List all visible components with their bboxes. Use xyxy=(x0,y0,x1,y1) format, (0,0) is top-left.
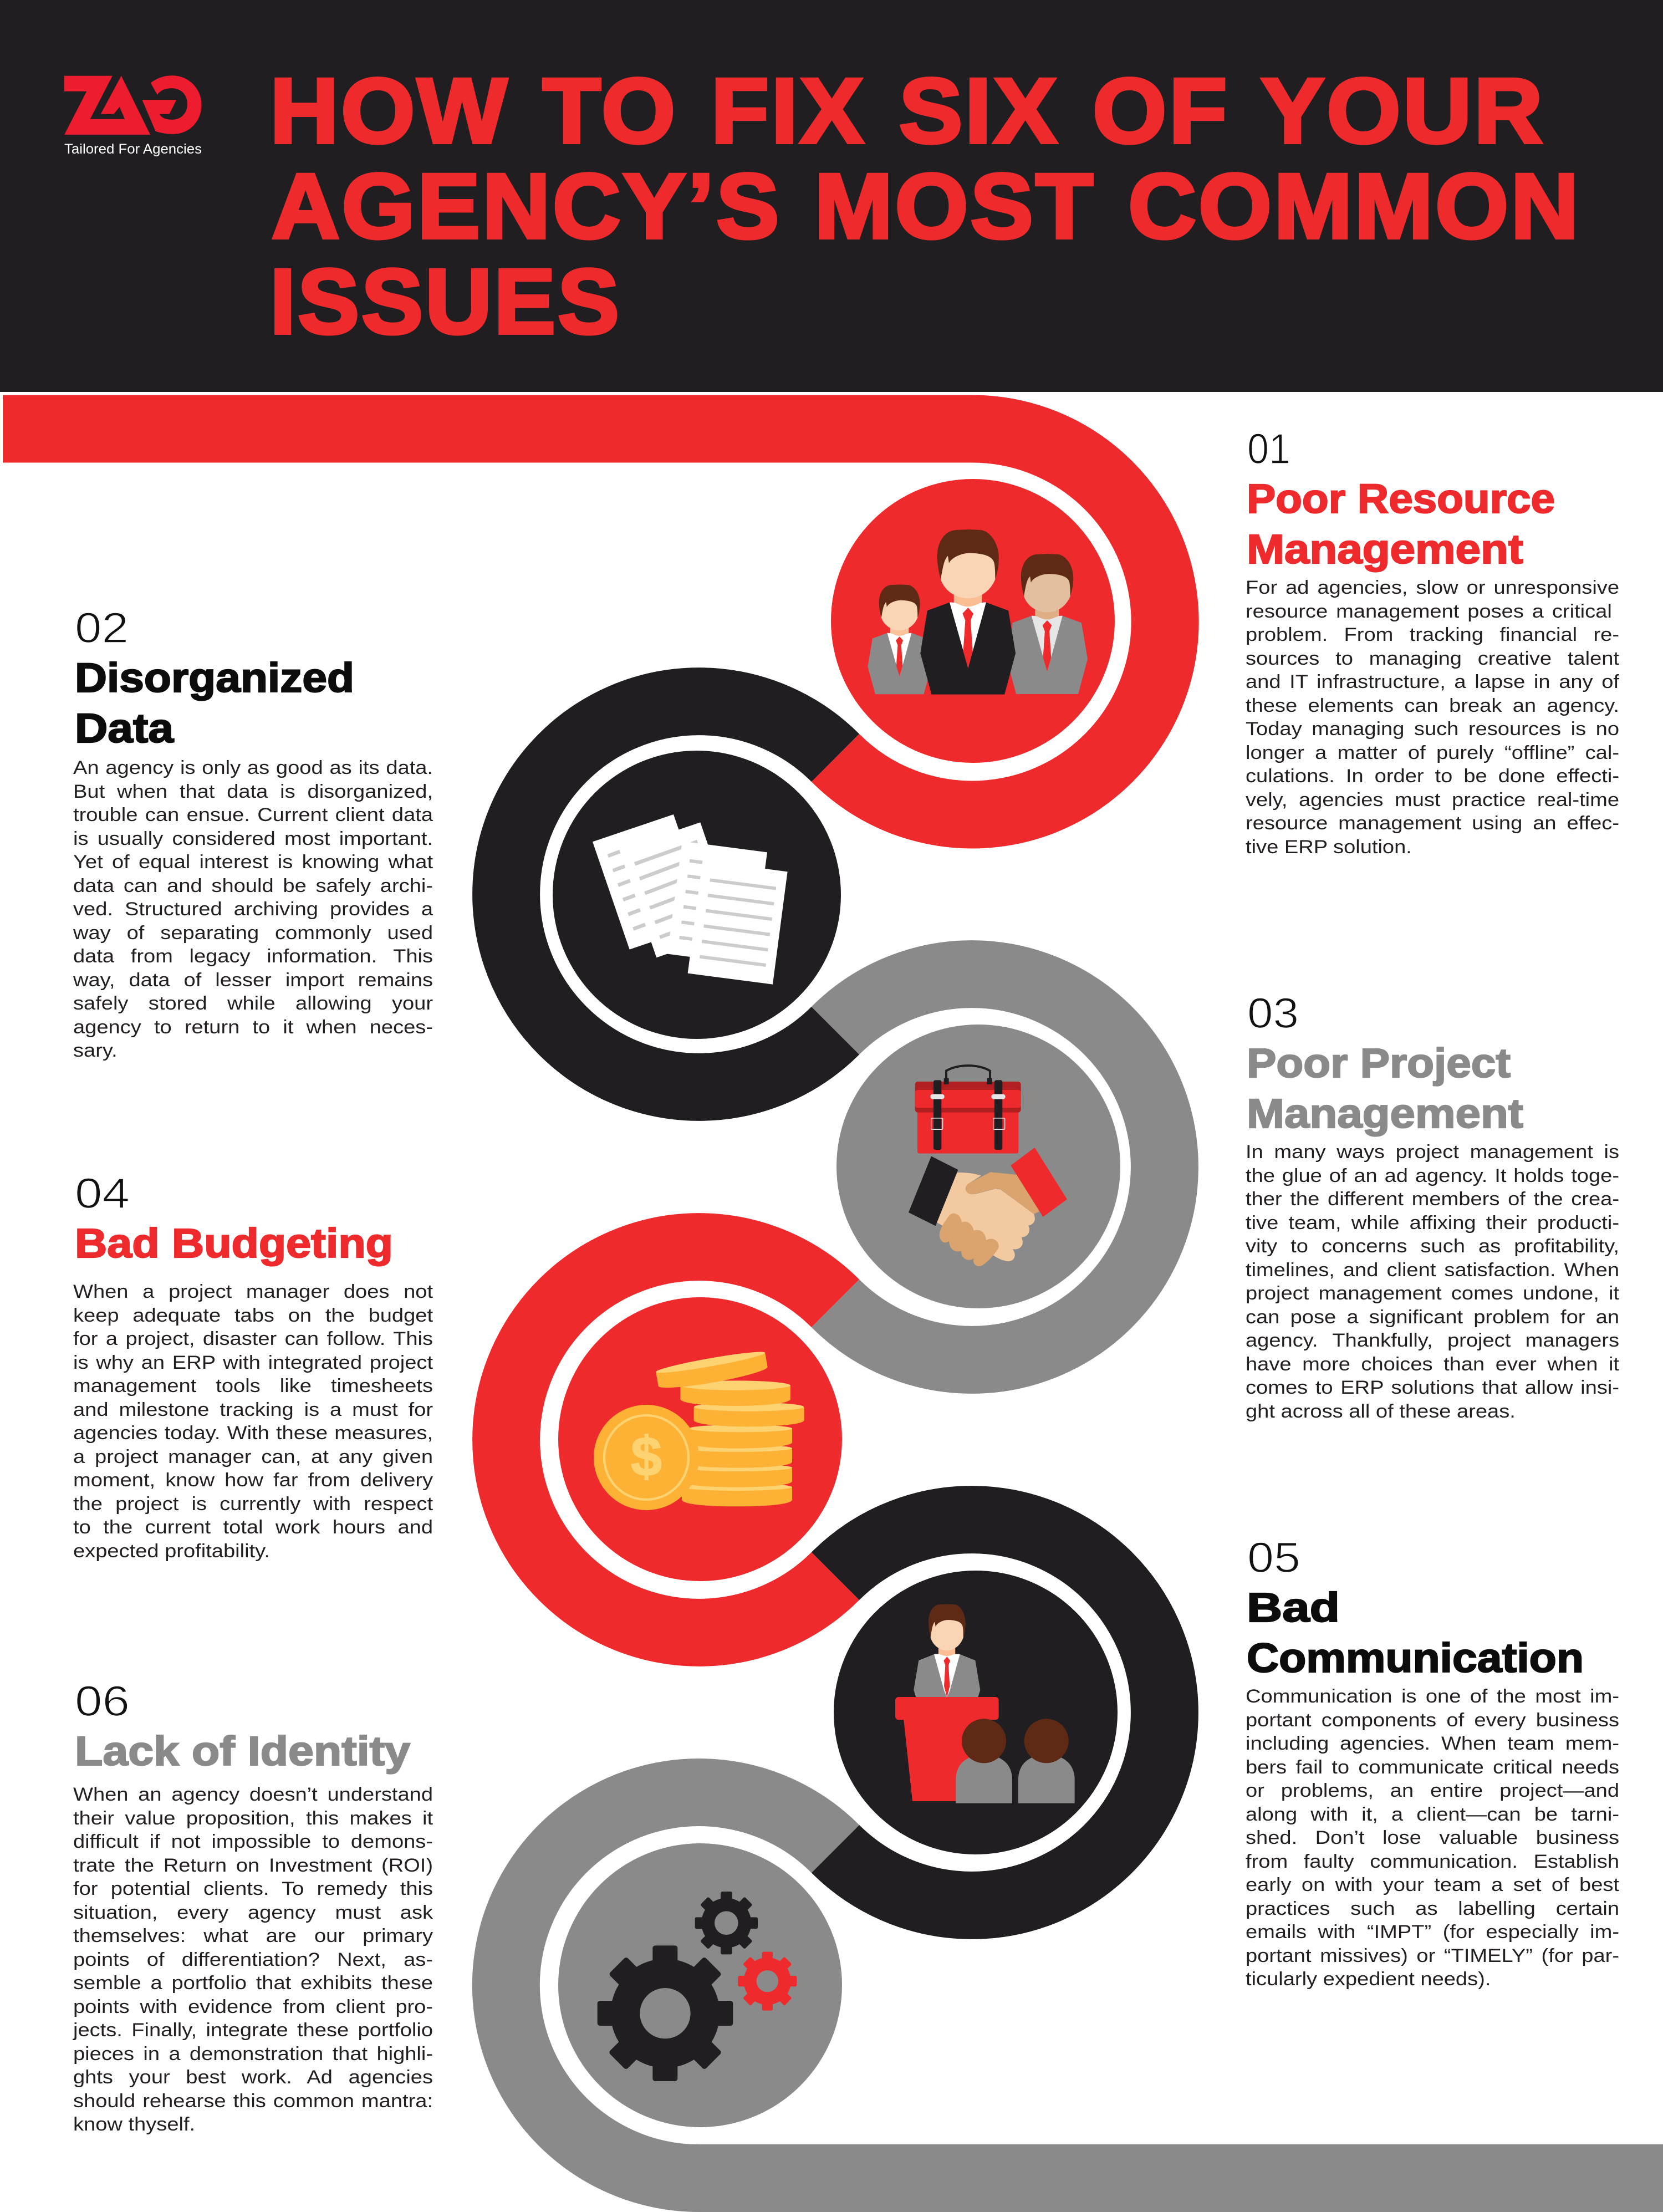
body text 01: Today managing such resources is no xyxy=(1246,718,1619,740)
body text 03: In many ways project management is xyxy=(1246,1141,1619,1163)
body text 02: agency to return to it when neces- xyxy=(73,1017,433,1038)
title: HOW TO FIX SIX OF YOUR xyxy=(270,60,1545,162)
icon: gears xyxy=(598,1892,797,2081)
panel 02: Disorganized Data xyxy=(73,609,433,1061)
body text 04 xyxy=(73,1281,433,1561)
body text 03: ght across all of these areas. xyxy=(1246,1400,1516,1421)
heading 03 xyxy=(1247,1040,1523,1136)
panel 01: Poor Resource Management xyxy=(1246,430,1619,857)
heading 02 xyxy=(75,655,354,751)
body text 01: For ad agencies, slow or unresponsive xyxy=(1246,577,1619,598)
body text 06: pieces in a demonstration that highli- xyxy=(73,2043,433,2065)
body text 06: points of differentiation? Next, as- xyxy=(73,1949,433,1970)
heading 05: Communication xyxy=(1247,1635,1584,1681)
body text 03: project management comes undone, it xyxy=(1246,1283,1619,1304)
disc 02 black xyxy=(553,751,841,1039)
body text 06: for potential clients. To remedy this xyxy=(73,1878,433,1899)
body text 02: But when that data is disorganized, xyxy=(73,781,433,802)
body text 06: When an agency doesn’t understand xyxy=(73,1784,433,1805)
disc 05 black xyxy=(834,1571,1118,1854)
body text 01: resource management using an effec- xyxy=(1246,813,1619,834)
body text 04: for a project, disaster can follow. This xyxy=(73,1328,433,1349)
body text 04: a project manager can, at any given xyxy=(73,1446,433,1467)
disc 06 grey xyxy=(558,1843,842,2127)
ribbon segment 01 red xyxy=(3,429,1165,814)
body text 05: Communication is one of the most im- xyxy=(1246,1686,1619,1707)
body text 06: should rehearse this common mantra: xyxy=(73,2090,433,2111)
body text 01: and IT infrastructure, a lapse in any of xyxy=(1246,671,1619,692)
icon: briefcase and handshake xyxy=(909,1066,1067,1266)
heading 02: Data xyxy=(75,705,174,751)
body text 01: resource management poses a critical xyxy=(1246,601,1612,622)
body text 01: problem. From tracking financial re- xyxy=(1246,624,1619,645)
body text 06: semble a portfolio that exhibits these xyxy=(73,1973,433,1994)
body text 01: tive ERP solution. xyxy=(1246,836,1412,857)
logo: ZAG: Tailored For Agencies xyxy=(64,141,202,157)
body text 02: safely stored while allowing your xyxy=(73,993,433,1014)
icon: speaker at podium with audience xyxy=(895,1604,1075,1803)
body text 04: keep adequate tabs on the budget xyxy=(73,1305,433,1326)
body text 03: the glue of an ad agency. It holds toge- xyxy=(1246,1165,1619,1186)
ribbon segment 03 grey xyxy=(835,974,1165,1360)
title: ISSUES xyxy=(270,251,621,353)
body text 03: comes to ERP solutions that allow insi- xyxy=(1246,1377,1619,1398)
title xyxy=(270,60,1581,353)
body text 05: early on with your team a set of best xyxy=(1246,1874,1619,1895)
body text 06: difficult if not impossible to demons- xyxy=(73,1831,433,1852)
body text 05: from faulty communication. Establish xyxy=(1246,1851,1619,1872)
heading 02: Disorganized xyxy=(75,655,354,701)
body text 02: ved. Structured archiving provides a xyxy=(73,899,433,920)
icon: scattered documents xyxy=(593,814,788,985)
body text 06: know thyself. xyxy=(73,2114,195,2135)
body text 06: their value proposition, this makes it xyxy=(73,1807,433,1828)
ribbon segment 06 grey with bottom bar xyxy=(506,1792,1663,2178)
heading 01: Poor Resource xyxy=(1247,476,1555,522)
heading 05: Bad xyxy=(1247,1584,1340,1630)
body text 03: can pose a significant problem for an xyxy=(1246,1306,1619,1327)
body text 02: sary. xyxy=(73,1040,118,1061)
disc 04 red xyxy=(558,1297,842,1581)
ribbon segment 02 black xyxy=(506,701,835,1087)
body text 06: situation, every agency must ask xyxy=(73,1902,433,1923)
body text 05: portant missives) or “TIMELY” (for par- xyxy=(1246,1945,1619,1966)
body text 04: agencies today. With these measures, xyxy=(73,1423,433,1444)
body text 03: vity to concerns such as profitability, xyxy=(1246,1236,1619,1257)
ribbon segment 05 black xyxy=(835,1520,1165,1905)
body text 03: have more choices than ever when it xyxy=(1246,1354,1619,1375)
body text 01: sources to managing creative talent xyxy=(1246,648,1619,669)
body text 03 xyxy=(1246,1141,1619,1421)
heading 05 xyxy=(1247,1584,1584,1681)
heading 06: Lack of Identity xyxy=(75,1728,410,1774)
body text 05: bers fail to communicate critical needs xyxy=(1246,1756,1619,1777)
body text 04: and milestone tracking is a must for xyxy=(73,1399,433,1420)
logo: ZAG xyxy=(64,75,202,157)
heading 04: Bad Budgeting xyxy=(75,1220,393,1266)
body text 06: jects. Finally, integrate these portfolio xyxy=(73,2020,433,2041)
body text 01 xyxy=(1246,577,1619,857)
icon: stack of coins xyxy=(594,1349,804,1510)
body text 04: to the current total work hours and xyxy=(73,1517,433,1538)
body text 02: data can and should be safely archi- xyxy=(73,875,433,896)
body text 04: management tools like timesheets xyxy=(73,1375,433,1396)
body text 01: culations. In order to be done effecti- xyxy=(1246,766,1619,787)
body text 05: portant components of every business xyxy=(1246,1710,1619,1731)
body text 05: ticularly expedient needs). xyxy=(1246,1969,1491,1990)
body text 06: points with evidence from client pro- xyxy=(73,1996,433,2017)
body text 04: the project is currently with respect xyxy=(73,1494,433,1515)
body text 02: way, data of lesser import remains xyxy=(73,969,433,990)
body text 02: An agency is only as good as its data. xyxy=(73,757,433,778)
heading 01 xyxy=(1247,476,1555,572)
body text 03: agency. Thankfully, project managers xyxy=(1246,1330,1619,1351)
body text 02: Yet of equal interest is knowing what xyxy=(73,852,433,873)
body text 05: emails with “IMPT” (for especially im- xyxy=(1246,1922,1619,1943)
panel 06: Lack of Identity xyxy=(73,1683,433,2135)
header band xyxy=(0,0,1663,392)
body text 02 xyxy=(73,757,433,1061)
body text 05: shed. Don’t lose valuable business xyxy=(1246,1827,1619,1848)
icon: stack of coins: $ xyxy=(631,1426,662,1488)
title: AGENCY’S MOST COMMON xyxy=(272,155,1581,258)
body text 05: or problems, an entire project—and xyxy=(1246,1780,1619,1801)
body text 05 xyxy=(1246,1686,1619,1990)
header content: logo and title xyxy=(64,60,1581,353)
disc 01 red xyxy=(831,479,1115,763)
ribbon segment 04 red xyxy=(506,1247,835,1633)
panel 05: Bad Communication xyxy=(1246,1539,1619,1990)
body text 06: themselves: what are our primary xyxy=(73,1925,433,1946)
heading 01: Management xyxy=(1247,526,1523,572)
heading 03: Poor Project xyxy=(1247,1040,1511,1086)
body text 01: these elements can break an agency. xyxy=(1246,695,1619,716)
body text 04: When a project manager does not xyxy=(73,1281,433,1302)
body text 02: way of separating commonly used xyxy=(73,922,433,944)
body text 04: is why an ERP with integrated project xyxy=(73,1352,433,1373)
body text 06: ghts your best work. Ad agencies xyxy=(73,2067,433,2088)
body text 05: along with it, a client—can be tarni- xyxy=(1246,1804,1619,1825)
panel 04: Bad Budgeting xyxy=(73,1175,433,1561)
body text 03: timelines, and client satisfaction. When xyxy=(1246,1260,1619,1281)
body text 04: moment, know how far from delivery xyxy=(73,1470,433,1491)
body text 05: practices such as labelling certain xyxy=(1246,1898,1619,1919)
body text 05: including agencies. When team mem- xyxy=(1246,1733,1619,1754)
body text 02: data from legacy information. This xyxy=(73,946,433,967)
heading 03: Management xyxy=(1247,1090,1523,1136)
body text 04: expected profitability. xyxy=(73,1540,270,1561)
panel 03: Poor Project Management xyxy=(1246,995,1619,1421)
body text 02: trouble can ensue. Current client data xyxy=(73,804,433,825)
body text 06: trate the Return on Investment (ROI) xyxy=(73,1855,433,1876)
body text 03: ther the different members of the crea- xyxy=(1246,1189,1619,1210)
icon: three business people xyxy=(868,529,1088,695)
disc 03 grey xyxy=(836,1025,1120,1308)
body text 01: vely, agencies must practice real-time xyxy=(1246,789,1619,811)
body text 06 xyxy=(73,1784,433,2135)
body text 02: is usually considered most important. xyxy=(73,828,433,849)
body text 01: longer a matter of purely “offline” cal- xyxy=(1246,742,1619,763)
body text 03: tive team, while affixing their producti- xyxy=(1246,1212,1619,1233)
